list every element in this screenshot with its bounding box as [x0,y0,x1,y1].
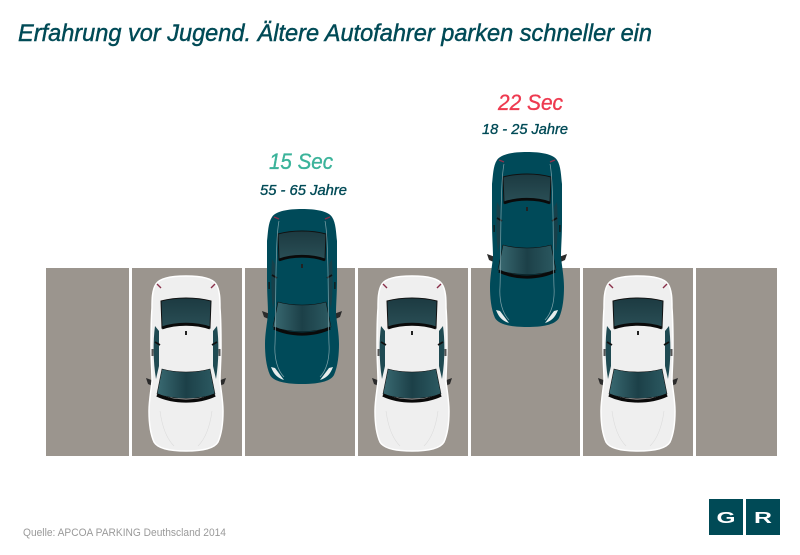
white parked car 1 [146,276,226,451]
white parked car 2 [372,276,452,451]
logo: G [716,510,736,527]
logo [709,499,780,535]
source: Quelle: APCOA PARKING Deuthscland 2014 [23,527,226,539]
label: 18 - 25 Jahre: 18 - 25 Jahre [482,121,568,138]
label: 22 Sec: 22 Sec [497,90,563,115]
label: 15 Sec: 15 Sec [269,149,333,174]
logo: R [754,510,773,527]
teal car: older driver [262,209,342,384]
label: 55 - 65 Jahre: 55 - 65 Jahre [260,182,347,199]
white parked car 3 [598,276,678,451]
title: Erfahrung vor Jugend. Ältere Autofahrer parken schneller ein [18,20,652,47]
parking lot [46,268,777,456]
teal car: younger driver [487,152,567,327]
